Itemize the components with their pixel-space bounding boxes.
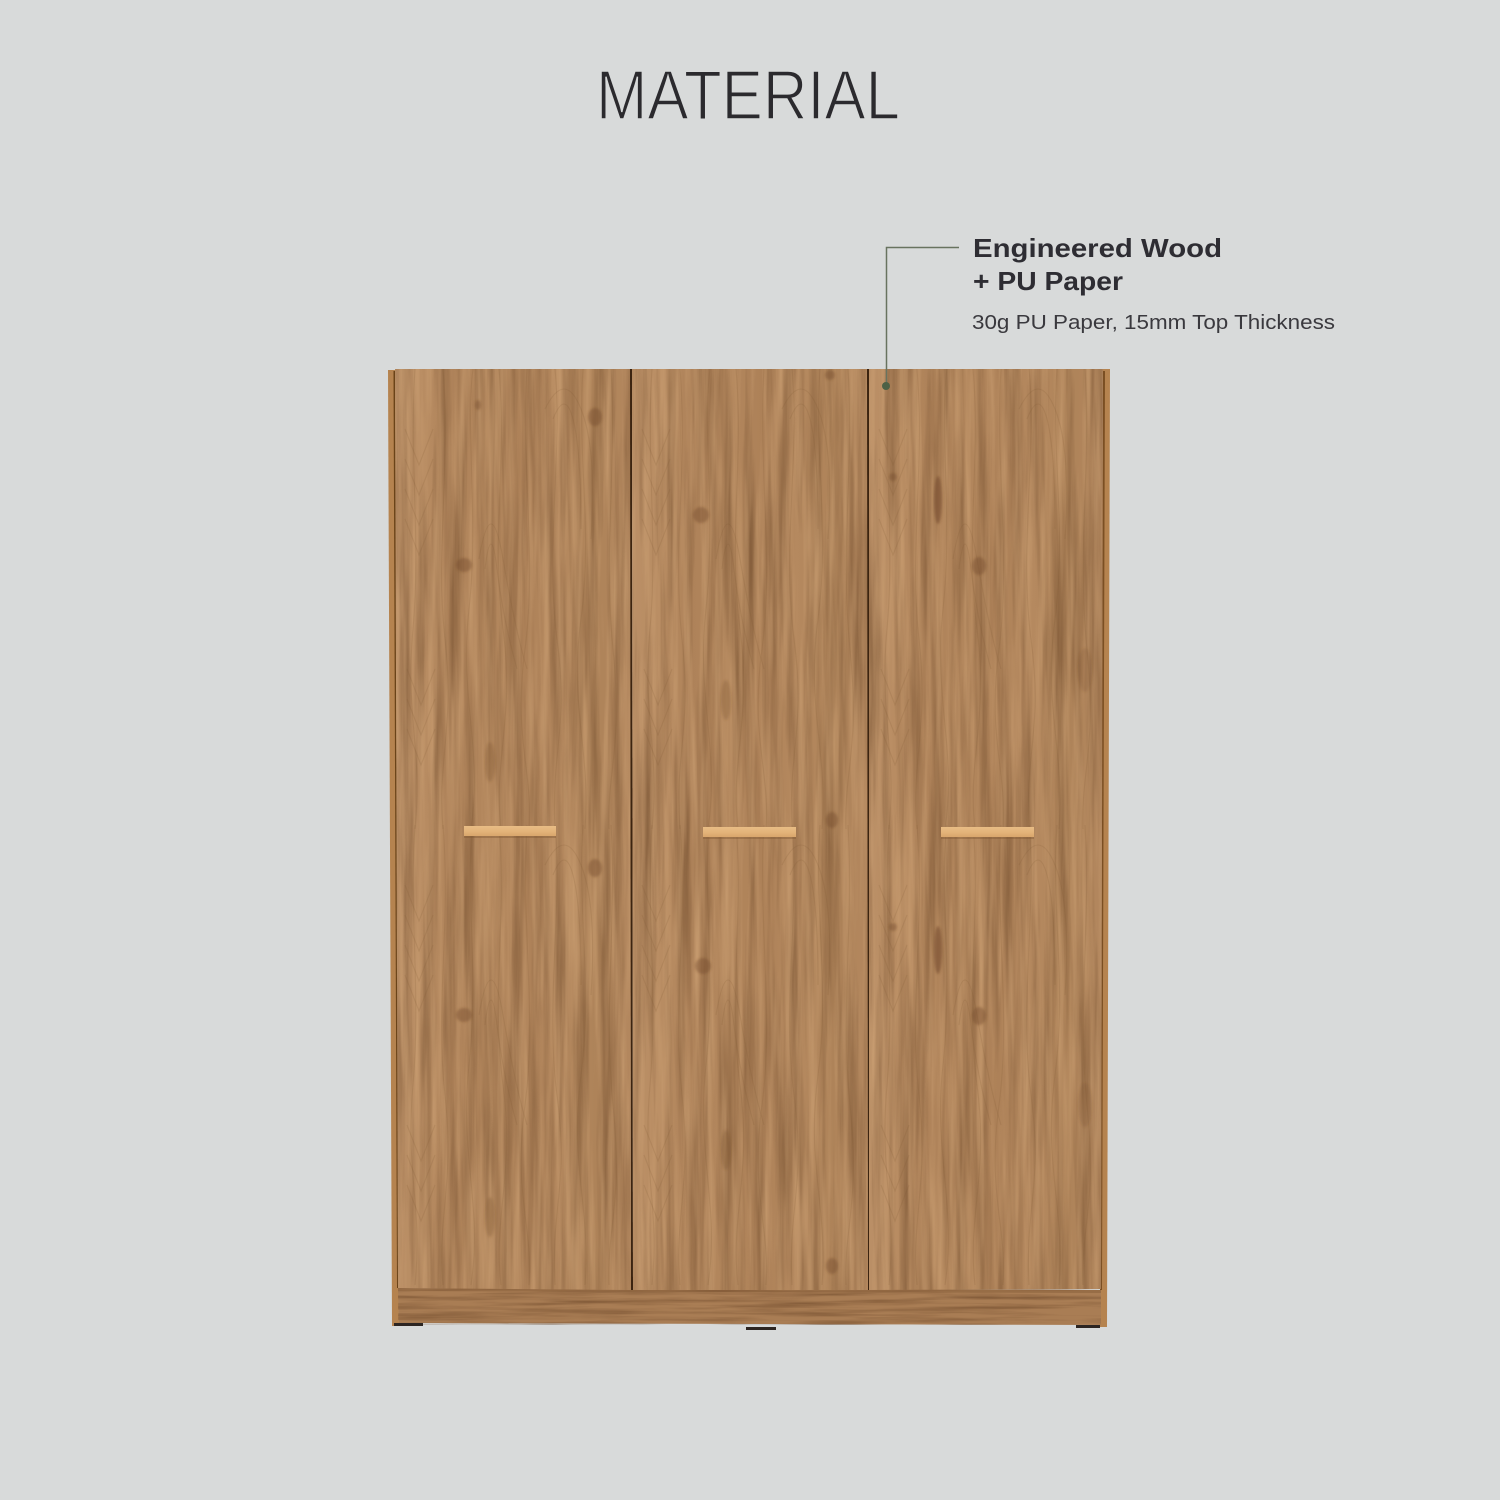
- feet: [394, 1323, 1100, 1330]
- left side panel: [388, 370, 399, 1326]
- callout detail: 30g PU Paper, 15mm Top Thickness: [972, 312, 1335, 334]
- right side panel: [1100, 369, 1110, 1327]
- plinth: [398, 1288, 1101, 1325]
- callout heading: Engineered Wood: [973, 233, 1222, 263]
- door left: [395, 369, 631, 1290]
- door right: [869, 369, 1104, 1290]
- callout: + PU Paper: [973, 266, 1123, 296]
- leader dot: [882, 382, 890, 390]
- knots: [693, 370, 838, 1274]
- leader line: [886, 248, 959, 385]
- handle right: [941, 827, 1034, 839]
- callout: [882, 233, 1335, 390]
- title: MATERIAL: [596, 56, 900, 134]
- door middle: [632, 369, 868, 1290]
- knots: [889, 473, 1092, 1127]
- wardrobe: [388, 369, 1110, 1330]
- handle middle: [703, 827, 796, 839]
- door gaps: [394, 369, 1105, 1290]
- knots: [456, 400, 602, 1237]
- handle left: [464, 826, 556, 838]
